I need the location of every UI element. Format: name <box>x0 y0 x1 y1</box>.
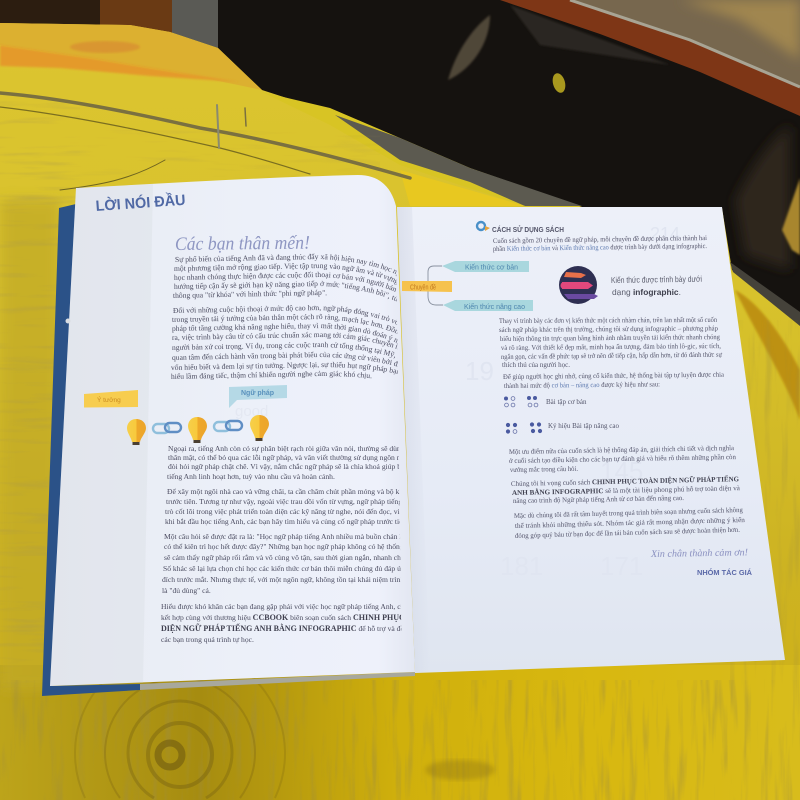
worn paint patch <box>425 760 495 780</box>
tag: ngữ pháp: Ngữ pháp <box>241 390 274 397</box>
tag: ý tưởng: Ý tưởng <box>97 395 121 404</box>
foreword body text: trước tiên. Tương tự như vậy, ngoài việc trau dồi vốn từ vựng, ngữ pháp tiếng Anh đóng <box>166 497 434 506</box>
knot rings <box>75 648 285 798</box>
foreword body text: Hiểu được khó khăn các bạn đang gặp phải với việc học ngữ pháp tiếng Anh, chúng tôi <box>161 602 426 611</box>
body text: method: Thay vì trình bày các đơn vị kiến thức một cách nhàm chán, trên lan nhất một số cuốn <box>499 316 717 325</box>
body text: method: sách ngữ pháp khác trên thị trường, chúng tôi sử dụng infographic – phương pháp <box>499 324 718 334</box>
legend: advanced exercises: Ký hiệu Bài tập nâng cao <box>548 422 619 430</box>
infographic caption: Kiến thức được trình bày dưới <box>611 274 702 285</box>
chain 1 <box>153 423 181 433</box>
binding hole <box>66 318 70 324</box>
body text: closing: Mặc dù chúng tôi đã rất tâm huyết trong quá trình biên soạn nhưng cuốn sách không <box>514 506 743 520</box>
foreword body text: Để xây một ngôi nhà cao và vững chãi, ta cần chăm chút phần móng và bộ khung ngay từ <box>167 487 440 496</box>
diagram: topic branches <box>402 261 533 311</box>
ghost show-through numbers <box>465 224 680 581</box>
ghost show-through numbers: 181 <box>500 551 543 581</box>
wooden plank top right <box>500 0 800 116</box>
tag: ý tưởng <box>84 390 138 408</box>
left page <box>50 175 415 686</box>
icon: infographic circle <box>559 266 598 304</box>
book cover <box>42 204 140 696</box>
infographic caption: dạng infographic. <box>612 287 681 297</box>
right side of the log <box>735 290 800 420</box>
foreword body text: trò cốt lõi trong việc phát triển toàn diện các kỹ năng từ nghe, nói đến đọc, viết. Bởi vậy <box>165 507 433 516</box>
foreword body text: ra, việc trình bày câu từ có cấu trúc chuẩn xác mang tới cảm giác chuyên nghiệp cho <box>172 332 398 350</box>
foreword body text: Số khác sẽ lại lựa chọn chỉ học các kiến thức cơ bản thôi miễn chúng đủ đáp ứng mục <box>163 564 424 573</box>
foreword body text: thân mật, có thể bỏ qua các lỗi ngữ pháp, và văn viết thường sử dụng ngôn ngữ trang <box>168 453 426 462</box>
foreword body text: kết hợp cùng với thương hiệu CCBOOK biên soạn cuốn sách CHINH PHỤC TOÀN <box>161 612 430 622</box>
grooves <box>0 93 410 190</box>
ghost show-through numbers: 214 <box>650 224 680 244</box>
body text: method: ngắn gọn, các vấn đề phức tạp sẽ trở nên dễ tiếp cận, hấp dẫn hơn, từ đó đánh thức sự <box>501 351 722 361</box>
intro text: phần Kiến thức cơ bản và Kiến thức nâng cao được trình bày dưới dạng infographic. <box>493 242 707 253</box>
intro text: Cuốn sách gồm 20 chuyên đề ngữ pháp, mỗi chuyên đề được phân chia thành hai <box>493 234 707 245</box>
left side tint <box>0 200 60 690</box>
icon: section pin <box>477 222 490 231</box>
ghost show-through numbers: 19 <box>465 356 494 386</box>
tag: chuyên đề: Chuyên đề <box>410 282 436 292</box>
body text: closing <box>509 444 745 540</box>
signature: NHÓM TÁC GIÁ <box>697 568 753 577</box>
body text: closing: vướng mắc trong câu hỏi. <box>510 465 578 474</box>
foreword body text: một phương tiện mở rộng giao tiếp. Việc tập trung vào ngữ âm và từ vựng cho phép người <box>174 263 396 285</box>
body text: method: thích thú của người học. <box>502 361 570 369</box>
left margin tint <box>50 184 153 686</box>
body text: method: và rõ ràng. Với thiết kế đẹp mắt, minh họa ấn tượng, đảm bảo tính lô-gic, súc tích, <box>501 342 721 352</box>
page gutter shadow <box>397 207 430 673</box>
foreword body text: trong truyền tải ý tưởng của bản thân một cách rõ ràng, mạch lạc hơn. Đồng thời, ngữ <box>172 314 398 334</box>
heading: cách sử dụng sách: CÁCH SỬ DỤNG SÁCH <box>492 225 564 234</box>
tag: kiến thức nâng cao: Kiến thức nâng cao <box>464 302 525 311</box>
legend: advanced exercises <box>506 422 619 434</box>
body text: method: Để giúp người học ghi nhớ, củng cố kiến thức, hệ thống bài tập tự luyện được chia <box>503 371 725 381</box>
body text: method <box>499 316 725 390</box>
foreword body text: thông qua "từ khóa" với hình thức "phi ngữ pháp". <box>173 290 326 300</box>
chain 2 <box>214 421 242 431</box>
foreword body text: học nhanh chóng thực hiện được các cuộc đối thoại cơ bản với người bản xứ. Tuy nhiên <box>174 272 396 292</box>
infographic caption <box>611 274 702 297</box>
foreword body text: DIỆN NGỮ PHÁP TIẾNG ANH BẰNG INFOGRAPHIC để hỗ trợ và đồng hành <box>161 623 429 633</box>
bulb 2 <box>188 417 207 443</box>
salutation: Các bạn thân mến! <box>175 233 310 255</box>
bottom tint <box>0 665 800 800</box>
ground details: leaf, seed and dark corner <box>448 5 800 270</box>
foreword body text: là "đủ dùng" cả. <box>162 586 211 595</box>
tag: kiến thức cơ bản: Kiến thức cơ bản <box>465 262 518 272</box>
foreword body text: đích trước mắt. Nhưng thực tế, với một ngôn ngữ, không tồn tại khái niệm trình độ nào <box>162 575 427 584</box>
body text: closing: thể tránh khỏi những thiếu sót. Nhóm tác giả rất mong nhận được những ý kiến <box>515 516 745 530</box>
foreword body text: tiếng Anh linh hoạt hơn, tuỳ vào nhu cầu và hoàn cảnh. <box>167 472 335 481</box>
icon: light bulbs and chains <box>127 415 269 445</box>
foreword body text: khi bắt đầu học tiếng Anh, các bạn hãy tìm hiểu và củng cố ngữ pháp trước tiên. <box>165 517 408 526</box>
log rim <box>262 92 585 208</box>
body text: closing: ANH BẰNG INFOGRAPHIC sẽ là một tài liệu phong phú hỗ trợ toàn diện và <box>512 484 741 497</box>
body text: method: thành hai mức độ cơ bản – nâng cao được ký hiệu như sau: <box>504 380 660 390</box>
foreword body text: Sự phổ biến của tiếng Anh đã và đang thúc đẩy xã hội hiện nay tìm học ngôn ngữ này <box>175 254 396 276</box>
tag: ngữ pháp <box>229 385 287 408</box>
bulb 1 <box>127 419 146 445</box>
ghost word: good <box>235 403 268 420</box>
top-left bark corner <box>0 0 218 48</box>
foreword body text: Ngoại ra, tiếng Anh còn có sự phân biệt rạch ròi giữa văn nói, thường sẽ dùng từ ngữ <box>168 444 427 453</box>
page stack edge <box>140 672 415 690</box>
foreword body text <box>161 254 402 644</box>
body text: closing: Một ưu điểm nữa của cuốn sách là hệ thống đáp án, giải thích chi tiết và dịch nghĩa <box>509 444 735 456</box>
foreword body text: đòi hỏi ngữ pháp chặt chẽ. Vì vậy, nắm chắc ngữ pháp sẽ là chìa khoá giúp bạn dùng <box>168 462 425 471</box>
foreword body text: hướng tiếp cận ấy sẽ giới hạn kỹ năng giao tiếp ở mức "tiếng Anh bồi", tức là chỉ nói <box>174 280 397 302</box>
right page <box>397 207 785 673</box>
foreword body text: có thể kiên trì học hết được đây?" Những bạn học ngữ pháp không có hệ thống khoa học <box>164 542 434 551</box>
body text: closing: Chúng tôi hi vọng cuốn sách CHINH PHỤC TOÀN DIỆN NGỮ PHÁP TIẾNG <box>511 475 740 488</box>
bulb 3 <box>250 415 269 441</box>
foreword body text: vốn hiểu biết và đem lại sự tin tưởng. Ngược lại, sự thiếu hụt ngữ pháp bạn có thể gây <box>171 362 398 374</box>
body text: method: biểu hiện thông tin trực quan bằng hình ảnh nhằm truyền tải kiến thức nhanh chóng <box>500 333 720 343</box>
foreword body text: người bản xứ coi trọng. Ví dụ, trong các cuộc tranh cử tổng thống tại Mỹ, truyền thông <box>172 342 395 358</box>
legend: basic exercises: Bài tập cơ bản <box>546 398 587 406</box>
foreword body text: quan tâm đến cách hành văn trong bài phát biểu của các ứng cử viên bởi điều đó phản <box>172 352 398 367</box>
foreword body text: Đối với những cuộc hội thoại ở mức độ cao hơn, ngữ pháp đóng vai trò vô cùng quan <box>173 305 398 325</box>
legend: basic exercises <box>504 396 587 407</box>
intro text <box>493 234 707 253</box>
foreword body text: pháp tốt tăng cường khả năng nghe hiểu, thay vì mất thời gian dò đoán ý nghĩa. Ngoài <box>172 322 398 345</box>
thanks line: Xin chân thành cảm ơn! <box>650 547 748 560</box>
chapter title: LỜI NÓI ĐẦU <box>95 191 186 215</box>
body text: closing: đóng góp quý báu từ bạn đọc để lần tái bản cuốn sách sau sẽ được hoàn thiện hơn. <box>515 526 740 540</box>
body text: closing: nâng cao trình độ Ngữ pháp tiếng Anh từ cơ bản đến nâng cao. <box>513 494 684 505</box>
ghost show-through numbers: 145 <box>600 456 643 486</box>
foreword body text: Một câu hỏi sẽ được đặt ra là: "Học ngữ pháp tiếng Anh nhiều mà buồn chán lắm, làm sao <box>164 532 438 541</box>
upper ledge <box>0 23 262 90</box>
foreword body text: hiểu lầm đáng tiếc, thậm chí khiến người nghe cảm giác khó chịu. <box>171 370 372 380</box>
foreword body text: các bạn trong quá trình tự học. <box>161 635 254 644</box>
foreword body text: sẽ cảm thấy ngữ pháp rối rắm và vô cùng vô tận, sau thời gian ngắn, nhanh chóng bỏ cuộc. <box>164 553 440 562</box>
body text: closing: ở cuối sách tạo điều kiện cho các bạn tự đánh giá và hiểu rõ thêm những phần còn <box>509 453 736 465</box>
ghost show-through numbers: 171 <box>600 551 643 581</box>
